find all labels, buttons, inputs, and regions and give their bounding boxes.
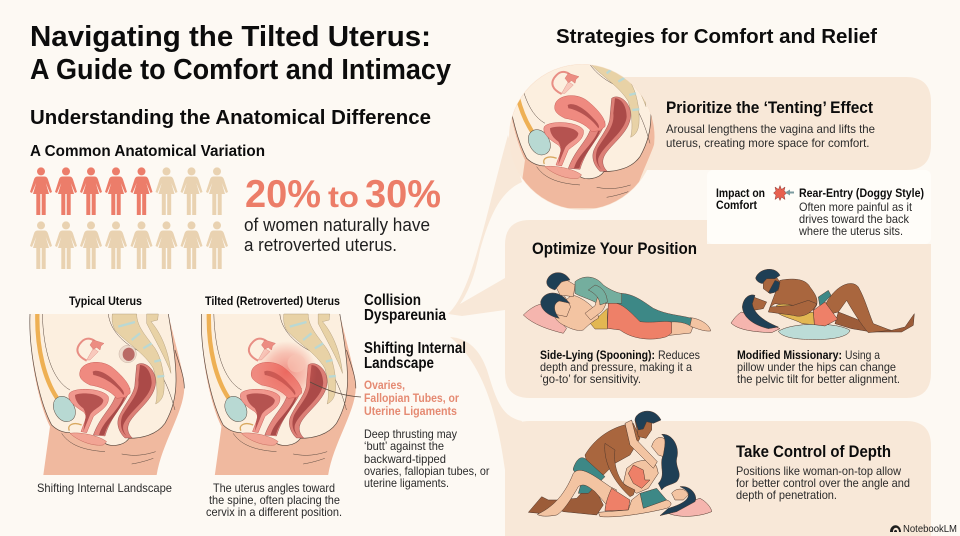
illustration: modified missionary couple (731, 269, 914, 340)
text: tenting body: Arousal lengthens the vagina and lifts the (666, 122, 875, 136)
label: impact on comfort: Comfort (716, 200, 757, 212)
panel: take control of depth (505, 411, 931, 536)
text: rear-entry: drives toward the back (799, 212, 910, 226)
text: deep thrusting: backward-tipped (364, 452, 446, 466)
stat: 20% to 30%: to (328, 181, 359, 214)
text: modified missionary: the pelvic tilt for better alignment. (737, 372, 900, 386)
text: modified missionary: Using a (845, 348, 880, 362)
panel: impact on comfort card (707, 170, 931, 244)
text: rear-entry: Rear-Entry (Doggy Style) (799, 188, 924, 200)
text: stat description (244, 215, 430, 255)
text: side-lying: Reduces (658, 348, 700, 362)
label: impact on comfort: Impact on (716, 188, 765, 200)
caption: typical uterus: Shifting Internal Landscape (37, 481, 172, 495)
text: deep thrusting: ‘butt’ against the (364, 439, 444, 453)
caption: tilted uterus (206, 481, 342, 519)
text: rear-entry: Often more painful as it (799, 200, 913, 214)
label: impact on comfort (716, 188, 765, 212)
caption: tilted uterus: The uterus angles toward (213, 481, 335, 495)
text: modified missionary: pillow under the hips can change (737, 360, 896, 374)
text: take control body: Positions like woman-on-top allow (736, 464, 901, 478)
label: ovaries fallopian tubes ligaments: Ovaries, (364, 378, 405, 392)
text: take control body: for better control over the angle and (736, 476, 910, 490)
text: deep thrusting: ovaries, fallopian tubes, or (364, 464, 490, 478)
label: typical uterus: Typical Uterus (69, 296, 142, 308)
heading: shifting internal landscape: Landscape (364, 355, 434, 372)
panel: prioritize the tenting effect (590, 77, 931, 170)
text: tenting body: uterus, creating more space for comfort. (666, 136, 870, 150)
text: side-lying: ‘go-to’ for sensitivity. (540, 372, 641, 386)
pain glow (256, 341, 317, 402)
text: stat description: of women naturally have (244, 215, 430, 235)
heading: strategies: Strategies for Comfort and Relief (556, 25, 877, 48)
title: A Guide to Comfort and Intimacy (30, 54, 451, 86)
heading: shifting internal landscape: Shifting Internal (364, 340, 466, 357)
heading: shifting internal landscape (364, 340, 466, 372)
text: side-lying: depth and pressure, making it a (540, 360, 692, 374)
connector: collision call-out to panels (448, 135, 522, 470)
stat: 20% to 30%: 30% (365, 173, 441, 216)
leader line (310, 382, 361, 397)
label: ovaries fallopian tubes ligaments (364, 378, 459, 418)
illustration: woman-on-top couple (528, 411, 712, 517)
icon: pain burst with arrow (774, 186, 794, 200)
label: tilted uterus: Tilted (Retroverted) Uterus (205, 296, 340, 308)
caption: tilted uterus: the spine, often placing the (209, 493, 340, 507)
text: rear-entry (798, 188, 924, 238)
chart: pictogram of women (30, 167, 228, 269)
text: take control body: depth of penetration. (736, 488, 837, 502)
label: ovaries fallopian tubes ligaments: Uterine Ligaments (364, 404, 457, 418)
title: Navigating the Tilted Uterus: (30, 21, 431, 53)
heading: collision dyspareunia (364, 292, 446, 324)
heading: optimize: Optimize Your Position (532, 239, 697, 258)
text: modified missionary (737, 348, 900, 386)
heading: collision dyspareunia: Collision (364, 292, 421, 309)
stat: 20% to 30%: 20% (245, 173, 321, 216)
diagram: tilted uterus (196, 310, 356, 475)
heading: understanding: Understanding the Anatomical Difference (30, 106, 431, 129)
text: stat description: a retroverted uterus. (244, 235, 397, 255)
text: deep thrusting: Deep thrusting may (364, 427, 457, 441)
diagram: typical uterus (25, 310, 184, 475)
label: ovaries fallopian tubes ligaments: Fallopian Tubes, or (364, 391, 459, 405)
text: side-lying: Side-Lying (Spooning): (540, 348, 655, 362)
ghost ovary (287, 354, 305, 372)
caption: tilted uterus: cervix in a different position. (206, 505, 342, 519)
heading: collision dyspareunia: Dyspareunia (364, 307, 446, 324)
heading: tenting: Prioritize the ‘Tenting’ Effect (666, 98, 873, 117)
text: rear-entry: where the uterus sits. (798, 224, 903, 238)
heading: take control: Take Control of Depth (736, 442, 891, 461)
icon: anatomy circle (509, 64, 654, 210)
text: deep thrusting (364, 427, 490, 490)
stat: 20% to 30% (245, 173, 441, 216)
panel: optimize your position (505, 220, 931, 398)
ovary (119, 345, 136, 363)
text: take control body (736, 464, 910, 502)
illustration: side-lying spooning couple (523, 273, 711, 339)
text: side-lying (540, 348, 700, 386)
text: modified missionary: Modified Missionary: (737, 348, 842, 362)
text: deep thrusting: uterine ligaments. (364, 476, 449, 490)
text: tenting body (666, 122, 875, 150)
heading: common variation: A Common Anatomical Variation (30, 143, 265, 160)
title (30, 21, 451, 86)
